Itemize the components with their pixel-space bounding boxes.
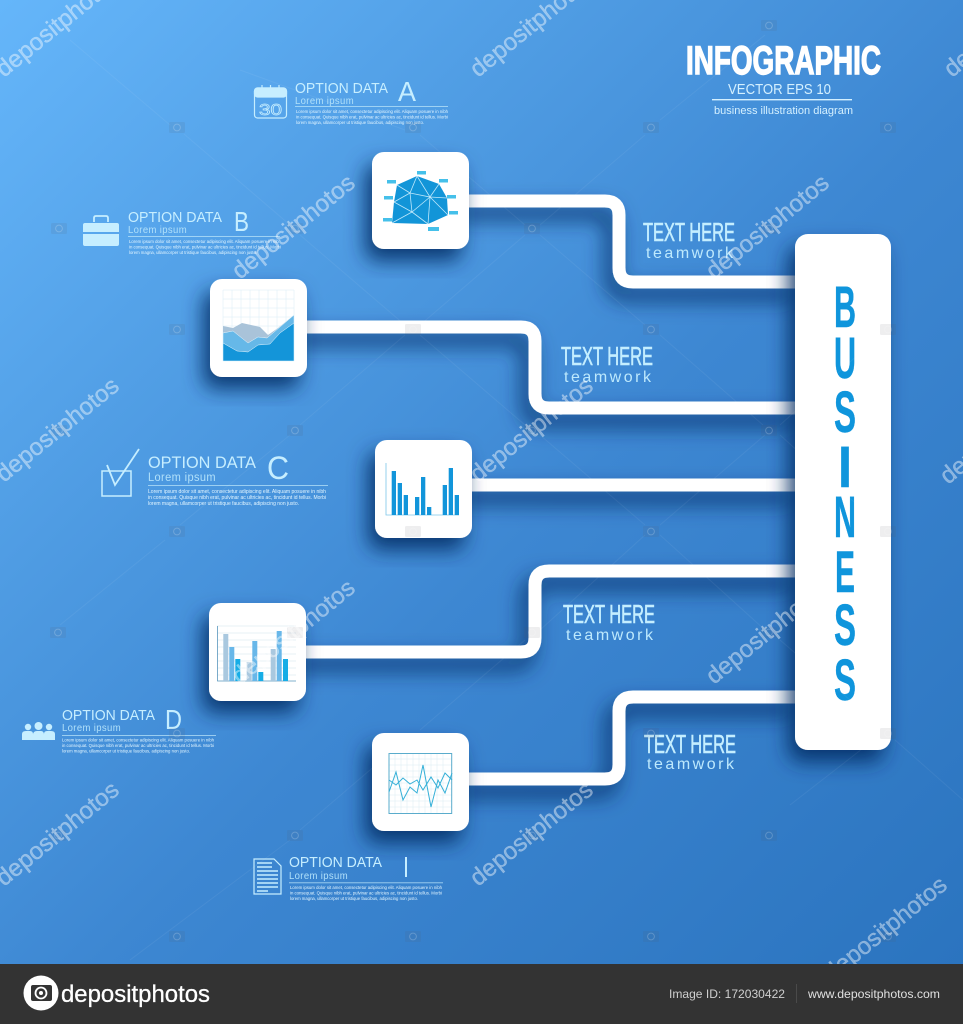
icon: checkbox	[102, 449, 139, 496]
option I: lorem magna, ullamcorper ut tristique faucibus, adipiscing non justo.	[290, 896, 418, 901]
title block: VECTOR EPS 10	[728, 81, 831, 98]
label: text here 2	[561, 341, 653, 386]
label: text here 1: TEXT HERE	[643, 217, 735, 247]
vertical word BUSINESS: E	[835, 540, 855, 605]
title block	[686, 39, 881, 117]
option A: lorem magna, ullamcorper ut tristique faucibus, adipiscing non justo.	[296, 120, 424, 125]
option B	[83, 206, 281, 255]
label: text here 4: TEXT HERE	[644, 729, 736, 759]
option I: Lorem ipsum dolor sit amet, consectetur adipiscing elit. Aliquam posuere in nibh	[290, 885, 442, 890]
option B: OPTION DATA	[128, 209, 222, 226]
option C: lorem magna, ullamcorper ut tristique faucibus, adipiscing non justo.	[148, 501, 299, 507]
card 1: network map chart	[372, 152, 469, 249]
option A: Lorem ipsum	[295, 95, 354, 107]
label: text here 2: TEXT HERE	[561, 341, 653, 371]
title block: INFOGRAPHIC	[686, 39, 881, 83]
option I: OPTION DATA	[289, 854, 382, 871]
label: text here 3	[563, 599, 655, 644]
vertical word BUSINESS: U	[834, 326, 856, 391]
label: text here 1	[643, 217, 735, 262]
option D: D	[165, 704, 182, 735]
vertical word BUSINESS: I	[838, 435, 852, 500]
option B: Lorem ipsum dolor sit amet, consectetur adipiscing elit. Aliquam posuere in nibh	[129, 239, 281, 244]
option A: Lorem ipsum dolor sit amet, consectetur adipiscing elit. Aliquam posuere in nibh	[296, 109, 448, 114]
footer bar	[0, 964, 963, 1024]
card 3: bar chart	[375, 440, 472, 538]
panel: business bar	[795, 234, 891, 750]
option B: in consequat. Quisque nibh erat, pulvinar ac ultricies ac, tincidunt id tellus. Morbi	[129, 244, 281, 250]
option D: in consequat. Quisque nibh erat, pulvinar ac ultricies ac, tincidunt id tellus. Morbi	[62, 743, 214, 748]
option I: in consequat. Quisque nibh erat, pulvinar ac ultricies ac, tincidunt id tellus. Morbi	[290, 890, 442, 896]
card 5: line chart	[372, 733, 469, 831]
option B: Lorem ipsum	[128, 224, 187, 236]
option C: C	[267, 450, 289, 486]
option I	[254, 854, 443, 901]
option C: Lorem ipsum dolor sit amet, consectetur adipiscing elit. Aliquam posuere in nibh	[148, 489, 326, 495]
watermark pattern: depositphotos	[701, 574, 834, 690]
option C: Lorem ipsum	[148, 472, 216, 484]
option D: Lorem ipsum dolor sit amet, consectetur adipiscing elit. Aliquam posuere in nibh	[62, 738, 214, 742]
option I: Lorem ipsum	[289, 870, 348, 882]
label: text here 3: TEXT HERE	[563, 599, 655, 629]
option C: OPTION DATA	[148, 453, 257, 472]
watermark pattern: depositphotos	[465, 776, 598, 892]
option C	[102, 449, 328, 507]
option D: lorem magna, ullamcorper ut tristique faucibus, adipiscing non justo.	[62, 748, 190, 754]
vertical word BUSINESS	[834, 275, 856, 713]
icon: people	[22, 722, 55, 740]
option A: OPTION DATA	[295, 80, 388, 97]
option A: in consequat. Quisque nibh erat, pulvinar ac ultricies ac, tincidunt id tellus. Morbi	[296, 114, 448, 120]
label: text here 4	[644, 729, 736, 773]
watermark pattern: depositphotos	[819, 871, 952, 987]
watermark pattern: depositphotos	[227, 574, 360, 690]
vertical word BUSINESS: B	[834, 275, 856, 340]
option B: B	[234, 206, 249, 237]
icon: camera logo	[24, 976, 58, 1010]
card 2: area chart	[210, 279, 307, 377]
option B: lorem magna, ullamcorper ut tristique faucibus, adipiscing non justo.	[129, 250, 257, 255]
option C: in consequat. Quisque nibh erat, pulvinar ac ultricies ac, tincidunt id tellus. Morbi	[148, 495, 326, 501]
footer bar: www.depositphotos.com	[807, 987, 940, 1001]
option D	[22, 704, 216, 754]
watermark pattern: depositphotos	[701, 169, 834, 285]
option A: A	[398, 76, 416, 107]
watermark pattern: depositphotos	[465, 372, 598, 488]
card 4: mixed bar chart	[209, 603, 306, 701]
vertical word BUSINESS: S	[834, 380, 856, 445]
icon: calendar: 30	[259, 102, 282, 119]
connector lines	[300, 201, 800, 779]
footer bar: Image ID: 172030422	[669, 987, 785, 1001]
vertical word BUSINESS: N	[834, 485, 856, 550]
footer bar: depositphotos	[61, 981, 210, 1008]
watermark pattern: depositphotos	[227, 169, 360, 285]
icon: document	[254, 859, 281, 894]
title block: business illustration diagram	[714, 105, 853, 117]
option A	[254, 76, 448, 125]
icon: calendar	[254, 85, 286, 119]
label: text here 4: teamwork	[647, 756, 735, 773]
label: text here 2: teamwork	[564, 369, 652, 386]
vertical word BUSINESS: S	[834, 648, 856, 713]
icon: briefcase	[83, 216, 119, 246]
label: text here 3: teamwork	[566, 627, 654, 644]
label: text here 1: teamwork	[646, 245, 734, 262]
option D: Lorem ipsum	[62, 722, 121, 734]
option D: OPTION DATA	[62, 707, 155, 724]
vertical word BUSINESS: S	[834, 593, 856, 658]
